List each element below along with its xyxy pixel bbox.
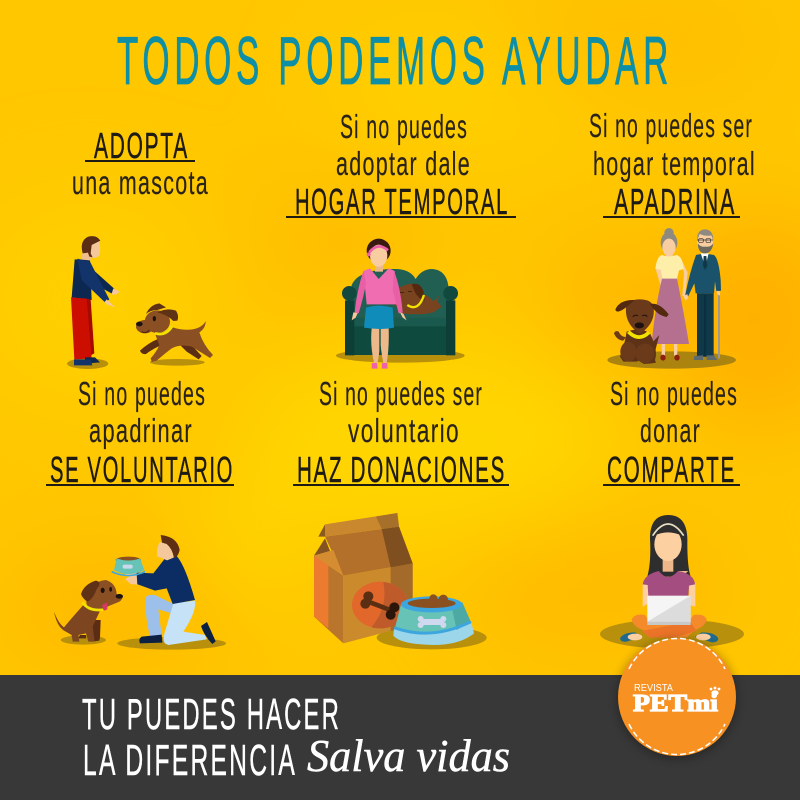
text block: haz donaciones: Si no puedes ser: [319, 375, 483, 412]
illustration: woman on sofa with dog: [336, 239, 465, 369]
text block: comparte: donar: [640, 412, 701, 449]
illustration: kneeling man offering food bowl to dog: [54, 535, 226, 650]
text block: se voluntario: apadrinar: [89, 412, 193, 449]
logo: Revista PETmi badge: [617, 638, 737, 759]
text block: se voluntario: Si no puedes: [78, 375, 206, 412]
logo: Revista PETmi badge: REVISTA: [634, 682, 673, 694]
text block: haz donaciones: [293, 375, 509, 490]
footer text: LA DIFERENCIA: [83, 736, 297, 785]
illustration: girl with laptop: [600, 515, 744, 649]
text block: haz donaciones: HAZ DONACIONES: [297, 449, 506, 490]
text block: adopta: ADOPTA: [94, 125, 189, 166]
footer text: TU PUEDES HACER: [82, 690, 341, 739]
text block: haz donaciones: voluntario: [348, 412, 460, 449]
text block: apadrina: [589, 107, 756, 222]
text block: se voluntario: SE VOLUNTARIO: [50, 449, 234, 490]
text block: comparte: [603, 375, 740, 490]
text block: hogar temporal: HOGAR TEMPORAL: [295, 181, 509, 222]
text block: se voluntario: [46, 375, 234, 490]
illustration: man and running dog: [67, 236, 213, 369]
text block: hogar temporal: adoptar dale: [336, 145, 471, 182]
text block: adopta: una mascota: [72, 164, 209, 201]
text block: hogar temporal: [286, 108, 516, 222]
text block: adopta: [72, 125, 209, 201]
footer text: [82, 690, 510, 785]
footer text: Salva vidas: [307, 730, 510, 781]
illustration: food bag and bowl: [314, 513, 487, 649]
logo: Revista PETmi badge: PETmi: [633, 691, 718, 717]
footer band: [0, 675, 800, 800]
text block: hogar temporal: Si no puedes: [340, 108, 468, 145]
illustration: elderly couple and sitting dog: [607, 228, 736, 369]
